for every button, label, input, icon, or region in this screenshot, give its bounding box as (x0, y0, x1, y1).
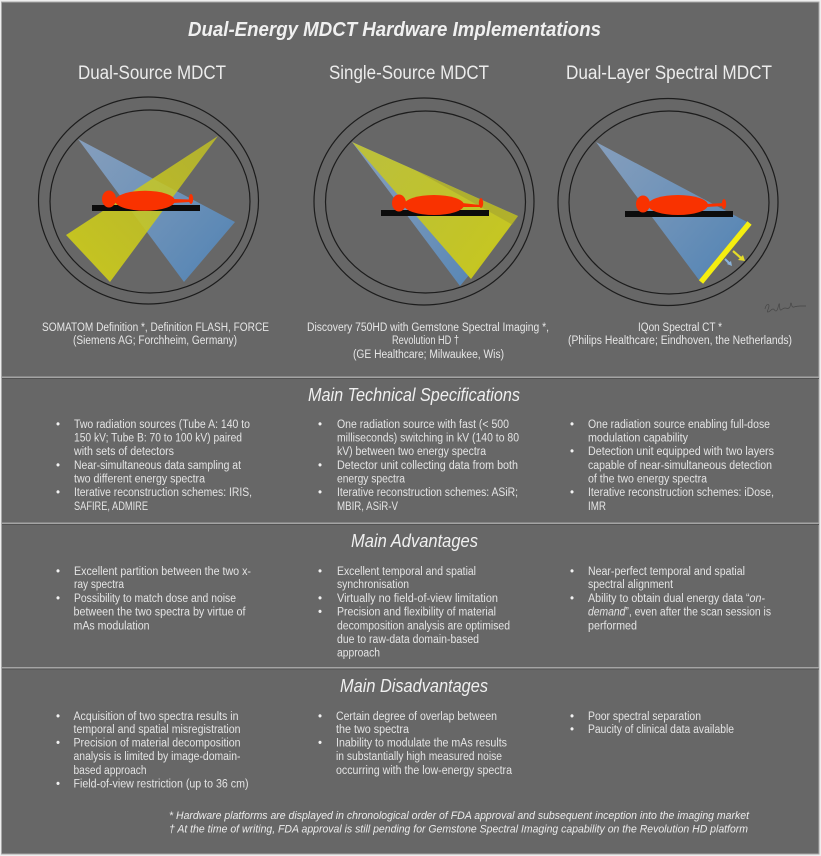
text block: disadvantages, dual-source: based approach (74, 765, 146, 777)
icon: yellow detector (701, 223, 750, 282)
footnotes: * Hardware platforms are displayed in chronological order of FDA approval and subsequent inception into the imaging market (169, 810, 750, 822)
text block: advantages, dual-layer: demand”, even after the scan session is (588, 606, 771, 618)
text block: disadvantages, dual-source: temporal and spatial misregistration (74, 724, 240, 736)
text block: disadvantages, dual-source: • (56, 738, 60, 750)
text block: specifications, dual-source: • (56, 419, 60, 431)
text block: specifications, dual-layer: • (570, 419, 574, 431)
text block: advantages, single-source: Excellent temporal and spatial (337, 566, 476, 578)
text block: specifications, single-source: energy spectra (337, 474, 406, 486)
text block: advantages, dual-source: mAs modulation (74, 620, 150, 632)
text block: specifications, dual-layer: Detection unit equipped with two layers (588, 446, 774, 458)
column heading: dual-source: Dual-Source MDCT (78, 63, 226, 84)
text block: advantages, single-source (318, 566, 510, 660)
text block: specifications, single-source: • (318, 487, 322, 499)
footnotes (169, 810, 750, 836)
text block: disadvantages, single-source: in substantially high measured noise (336, 751, 502, 763)
title: Dual-Energy MDCT Hardware Implementations (188, 19, 601, 41)
text block: specifications, dual-source (56, 419, 252, 513)
text block: specifications, dual-source: Two radiation sources (Tube A: 140 to (74, 419, 250, 431)
text block: disadvantages, single-source (318, 711, 513, 777)
caption: single-source products (307, 322, 549, 361)
text block: advantages, dual-source: ray spectra (74, 579, 125, 591)
text block: advantages, single-source: • (318, 566, 322, 578)
text block: disadvantages, dual-source: analysis is limited by image-domain- (74, 751, 241, 763)
caption: dual-layer products: (Philips Healthcare; Eindhoven, the Netherlands) (568, 335, 792, 347)
text block: disadvantages, dual-source (56, 711, 249, 790)
text block: advantages, dual-source: between the two spectra by virtue of (74, 606, 246, 618)
text block: disadvantages, dual-source: Acquisition of two spectra results in (74, 711, 238, 723)
text block: disadvantages, dual-source: • (56, 778, 60, 790)
text block: advantages, single-source: due to raw-data domain-based (337, 634, 479, 646)
text block: specifications, dual-source: with sets of detectors (73, 446, 174, 458)
text block: disadvantages, single-source: Inability to modulate the mAs results (336, 738, 507, 750)
text block: disadvantages, single-source: Certain degree of overlap between (336, 711, 497, 723)
text block: advantages, dual-layer (570, 566, 771, 632)
text block: disadvantages, single-source: • (318, 711, 322, 723)
text block: specifications, single-source: Detector unit collecting data from both (337, 460, 518, 472)
text block: advantages, dual-layer: Ability to obtain dual energy data “on- (588, 593, 765, 605)
caption: single-source products: (GE Healthcare; Milwaukee, Wis) (353, 349, 504, 361)
text block: disadvantages, single-source: the two spectra (336, 724, 410, 736)
text block: advantages, dual-layer: Near-perfect temporal and spatial (588, 566, 745, 578)
text block: specifications, dual-layer: • (570, 446, 574, 458)
text block: advantages, dual-source: • (56, 566, 60, 578)
diagram: single-source scanner (314, 98, 534, 305)
text block: specifications, dual-source: 150 kV; Tube B: 70 to 100 kV) paired (74, 432, 242, 444)
text block: specifications, single-source: • (318, 460, 322, 472)
text block: disadvantages, single-source: occurring with the low-energy spectra (336, 765, 513, 777)
text block: advantages, single-source: Precision and flexibility of material (337, 606, 496, 618)
text block: advantages, single-source: synchronisation (337, 579, 409, 591)
caption: single-source products: Discovery 750HD with Gemstone Spectral Imaging *, (307, 322, 549, 334)
caption: dual-layer products (568, 322, 792, 347)
text block: disadvantages, dual-source: • (56, 711, 60, 723)
caption: single-source products: Revolution HD † (392, 335, 459, 347)
text block: specifications, single-source: Iterative reconstruction schemes: ASiR; (337, 487, 518, 499)
text block: advantages, dual-source: • (56, 593, 60, 605)
column heading: dual-layer: Dual-Layer Spectral MDCT (566, 63, 772, 84)
caption: dual-source products (42, 322, 269, 347)
text block: specifications, single-source: kV) between two energy spectra (337, 446, 487, 458)
text block: advantages, single-source: Virtually no field-of-view limitation (337, 593, 498, 605)
icon: blue arrow (725, 259, 732, 266)
text block: advantages, dual-layer: • (570, 566, 574, 578)
heading: main disadvantages: Main Disadvantages (340, 676, 488, 696)
text block: advantages, dual-source: Possibility to match dose and noise (74, 593, 236, 605)
text block: specifications, dual-layer: One radiation source enabling full-dose (588, 419, 770, 431)
text block: specifications, dual-source: SAFIRE, ADMIRE (74, 501, 148, 513)
text block: specifications, single-source: milliseconds) switching in kV (140 to 80 (337, 432, 519, 444)
caption: dual-source products: SOMATOM Definition *, Definition FLASH, FORCE (42, 322, 269, 334)
text block: advantages, dual-layer: performed (588, 620, 637, 632)
text block: specifications, dual-layer: modulation capability (588, 432, 688, 444)
text block: specifications, dual-source: Near-simultaneous data sampling at (74, 460, 242, 472)
text block: specifications, dual-layer: IMR (588, 501, 606, 513)
heading: main advantages: Main Advantages (351, 531, 478, 551)
text block: specifications, single-source: • (318, 419, 322, 431)
text block: disadvantages, dual-source: Precision of material decomposition (74, 738, 240, 750)
text block: advantages, dual-source: Excellent partition between the two x- (74, 566, 251, 578)
text block: disadvantages, dual-layer: Paucity of clinical data available (588, 724, 734, 736)
text block: specifications, single-source: MBIR, ASiR-V (337, 501, 398, 513)
text block: specifications, dual-layer: capable of near-simultaneous detection (588, 460, 772, 472)
text block: disadvantages, dual-layer: • (570, 724, 574, 736)
diagram: dual-layer scanner (558, 98, 806, 312)
text block: specifications, dual-source: • (56, 487, 60, 499)
heading: main technical specifications: Main Technical Specifications (308, 385, 520, 405)
text block: disadvantages, single-source: • (318, 738, 322, 750)
text block: disadvantages, dual-source: Field-of-view restriction (up to 36 cm) (74, 778, 249, 790)
text block: disadvantages, dual-layer (570, 711, 734, 736)
text block: specifications, dual-layer: Iterative reconstruction schemes: iDose, (588, 487, 774, 499)
text block: specifications, dual-layer: • (570, 487, 574, 499)
caption: dual-layer products: IQon Spectral CT * (638, 322, 722, 334)
text block: advantages, dual-layer: • (570, 593, 574, 605)
text block: disadvantages, dual-layer: • (570, 711, 574, 723)
text block: advantages, single-source: • (318, 593, 322, 605)
diagram: dual-source scanner (38, 97, 258, 304)
signature (765, 303, 806, 312)
footnotes: † At the time of writing, FDA approval is still pending for Gemstone Spectral Imaging capability on the Revolution HD platform (169, 824, 748, 836)
text block: specifications, dual-source: two different energy spectra (74, 474, 206, 486)
text block: specifications, dual-layer: of the two energy spectra (588, 474, 708, 486)
text block: disadvantages, dual-layer: Poor spectral separation (588, 711, 701, 723)
column heading: single-source: Single-Source MDCT (329, 63, 489, 84)
text block: advantages, single-source: approach (337, 648, 380, 660)
text block: specifications, dual-source: • (56, 460, 60, 472)
text block: specifications, single-source: One radiation source with fast (< 500 (337, 419, 509, 431)
text block: advantages, single-source: decomposition analysis are optimised (337, 620, 510, 632)
icon: yellow arrow (733, 251, 745, 261)
text block: specifications, dual-layer (570, 419, 774, 513)
caption: dual-source products: (Siemens AG; Forchheim, Germany) (73, 335, 237, 347)
text block: specifications, dual-source: Iterative reconstruction schemes: IRIS, (74, 487, 252, 499)
text block: advantages, dual-layer: spectral alignment (588, 579, 674, 591)
text block: advantages, single-source: • (318, 606, 322, 618)
text block: advantages, dual-source (56, 566, 251, 632)
text block: specifications, single-source (318, 419, 519, 513)
